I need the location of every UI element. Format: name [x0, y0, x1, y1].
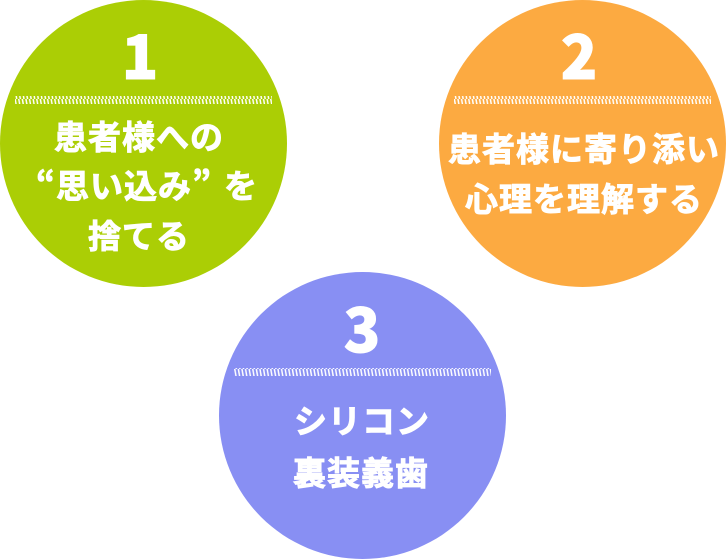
circle 1 text: 患者様への	[54, 111, 224, 159]
circle 1 text: 捨てる	[88, 210, 190, 258]
number 2: 2	[561, 10, 597, 97]
panel: circle 1	[0, 0, 287, 287]
circle 3 text: シリコン	[294, 395, 430, 443]
circle 1 text: を	[224, 160, 258, 208]
circle 2 background	[439, 0, 726, 287]
number 3: 3	[344, 283, 380, 370]
panel: circle 3	[219, 272, 506, 559]
circle 1 background	[0, 0, 287, 287]
circle 2 text: 患者様に寄り添い	[448, 123, 720, 171]
circle 3 text	[293, 395, 430, 495]
circle 1 text	[36, 111, 258, 258]
panel: circle 2	[439, 0, 726, 287]
circle 2 text: 心理を理解する	[465, 173, 703, 221]
circle 3 background	[219, 272, 506, 559]
circle 2 text	[448, 123, 720, 221]
circle 1 text: “思い込み”	[36, 160, 212, 208]
circle 3 text: 裏装義歯	[293, 447, 429, 495]
number 1: 1	[122, 10, 158, 97]
